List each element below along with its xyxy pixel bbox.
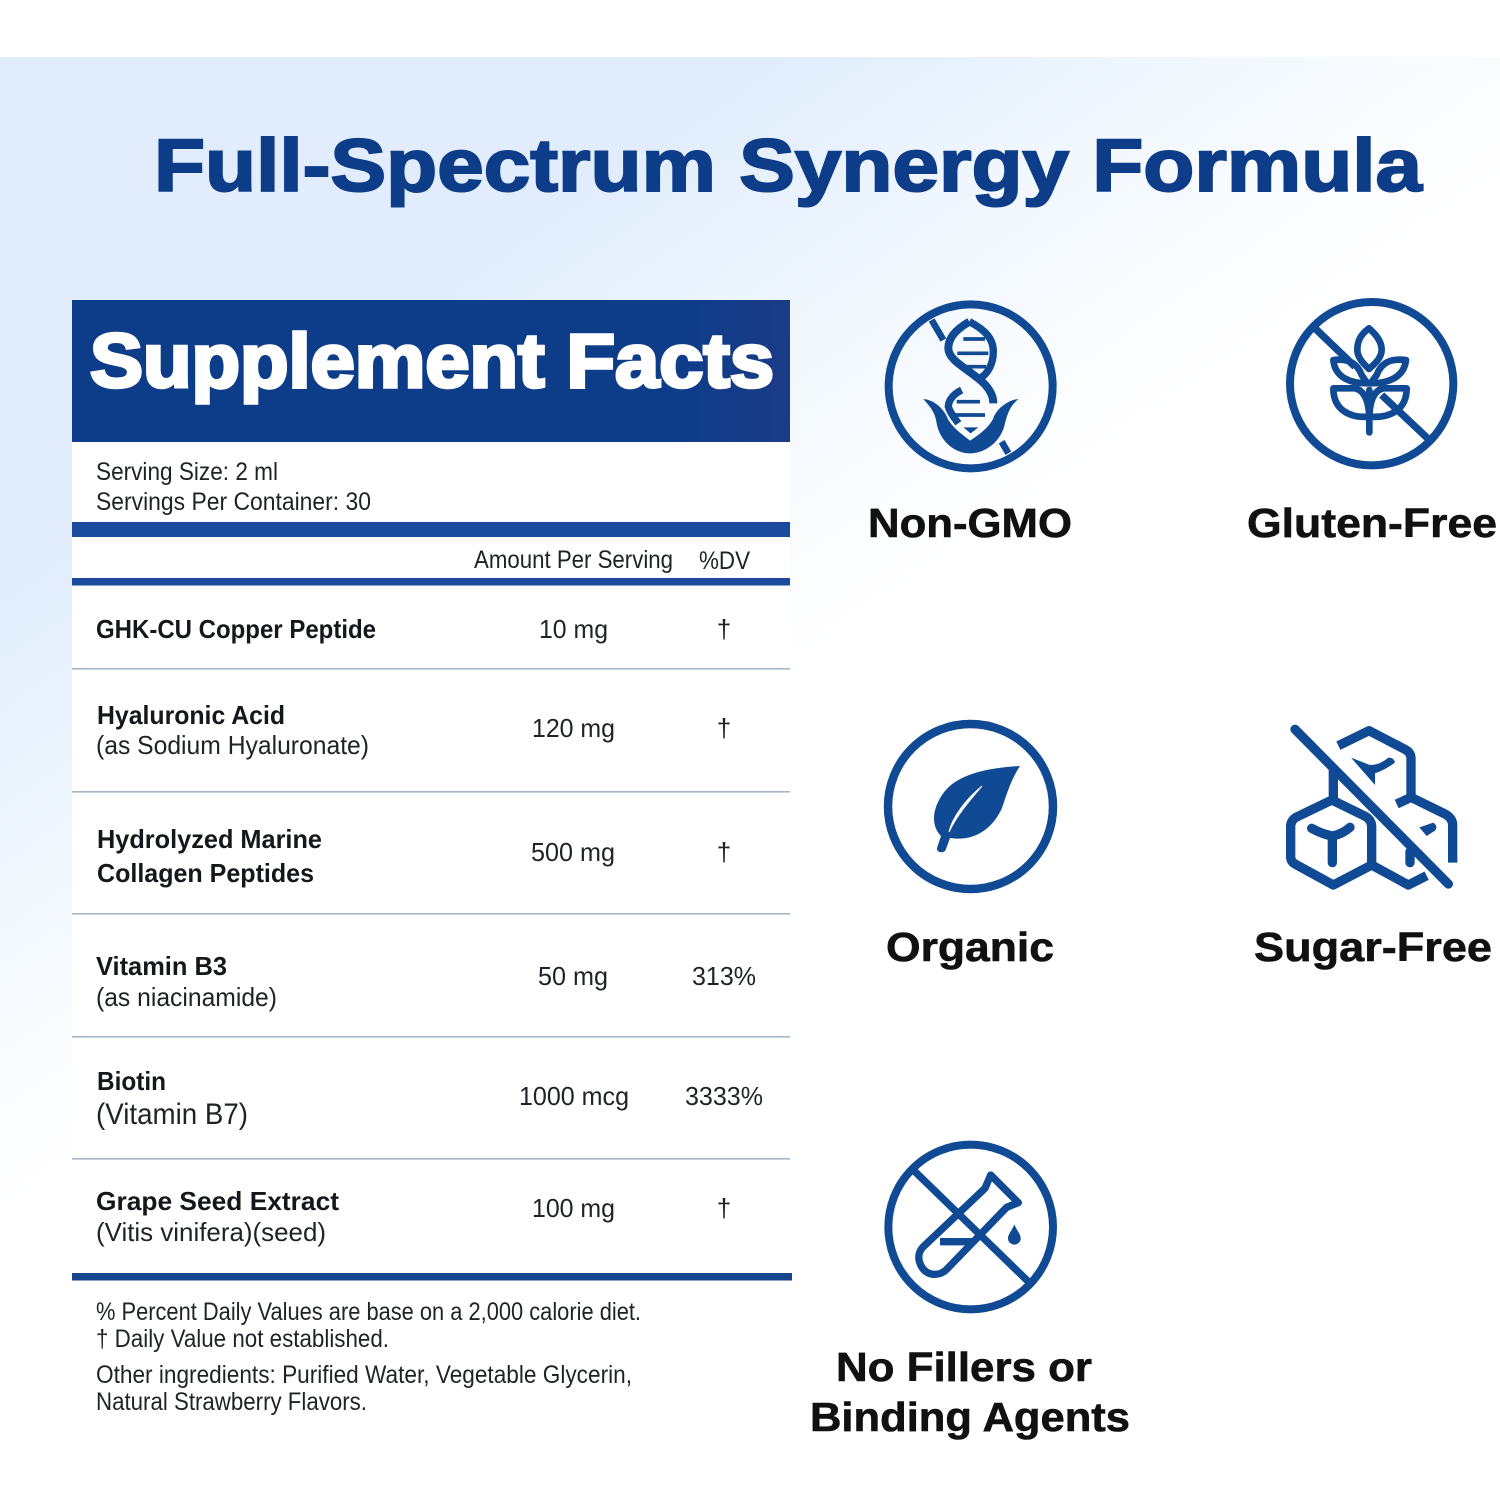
row: Biotin: (Vitamin B7): [96, 1098, 248, 1131]
row: Biotin: [96, 1066, 763, 1131]
row: Vitamin B3: [96, 951, 756, 1012]
footnotes: Other ingredients: Purified Water, Vegetable Glycerin,: [96, 1361, 632, 1389]
row: GHK-CU Copper Peptide: 10 mg: [539, 614, 608, 644]
row: Grape Seed Extract: (Vitis vinifera)(seed): [96, 1217, 326, 1247]
serving information: Servings Per Container: 30: [96, 488, 371, 516]
label: No Fillers or Binding Agents: Binding Agents: [810, 1394, 1130, 1440]
row: Hydrolyzed Marine Collagen Peptides: 500 mg: [531, 837, 615, 867]
label: Organic: Organic: [886, 924, 1054, 970]
serving information: Serving Size: 2 ml: [96, 458, 278, 486]
row: GHK-CU Copper Peptide: †: [717, 614, 731, 644]
icon: non-GMO DNA and leaf: [889, 304, 1053, 468]
icon: sugar-free cubes: [1291, 729, 1453, 885]
column headings: Amount Per Serving: [474, 546, 673, 574]
icon: organic leaf: [888, 724, 1053, 889]
row: GHK-CU Copper Peptide: [96, 614, 731, 644]
label: No Fillers or Binding Agents: [810, 1344, 1130, 1440]
row: Grape Seed Extract: 100 mg: [532, 1193, 615, 1223]
label: Gluten-Free: Gluten-Free: [1247, 500, 1497, 546]
footnotes: Natural Strawberry Flavors.: [96, 1388, 367, 1416]
row: Hydrolyzed Marine Collagen Peptides: †: [717, 837, 731, 867]
row: Hydrolyzed Marine Collagen Peptides: Collagen Peptides: [97, 858, 314, 888]
row: Hyaluronic Acid: 120 mg: [532, 713, 615, 743]
row: Hyaluronic Acid: [96, 700, 731, 760]
row: Vitamin B3: Vitamin B3: [96, 951, 227, 981]
icon: gluten-free wheat: [1290, 302, 1453, 465]
label: Sugar-Free: Sugar-Free: [1254, 924, 1492, 970]
label: Non-GMO: Non-GMO: [868, 500, 1072, 546]
row: Vitamin B3: 313%: [692, 961, 756, 991]
row: Vitamin B3: 50 mg: [538, 961, 608, 991]
footnotes: [96, 1298, 641, 1416]
row: Hyaluronic Acid: (as Sodium Hyaluronate): [96, 730, 369, 760]
row: Grape Seed Extract: †: [717, 1193, 731, 1223]
row: Hyaluronic Acid: †: [717, 713, 731, 743]
panel: supplement facts table: [72, 300, 792, 1282]
icon: no fillers test tube: [888, 1145, 1053, 1309]
row: Hyaluronic Acid: Hyaluronic Acid: [97, 700, 285, 730]
row: Hydrolyzed Marine Collagen Peptides: Hydrolyzed Marine: [97, 824, 322, 854]
title: Full-Spectrum Synergy Formula: [154, 124, 1423, 207]
row: Grape Seed Extract: Grape Seed Extract: [96, 1186, 339, 1216]
row: Biotin: Biotin: [97, 1066, 166, 1096]
footnotes: † Daily Value not established.: [96, 1325, 389, 1353]
footnotes: % Percent Daily Values are base on a 2,000 calorie diet.: [96, 1298, 641, 1326]
row: Biotin: 1000 mcg: [519, 1081, 629, 1111]
column headings: %DV: [699, 547, 750, 575]
table header: Supplement Facts: [90, 319, 774, 404]
serving information: [96, 458, 371, 516]
row: Biotin: 3333%: [685, 1081, 763, 1111]
label: No Fillers or Binding Agents: No Fillers or: [836, 1344, 1092, 1390]
row: Grape Seed Extract: [96, 1186, 731, 1247]
table header: [72, 300, 790, 442]
row: Vitamin B3: (as niacinamide): [96, 982, 277, 1012]
row: GHK-CU Copper Peptide: GHK-CU Copper Peptide: [96, 614, 376, 644]
row: Hydrolyzed Marine Collagen Peptides: [97, 824, 731, 888]
